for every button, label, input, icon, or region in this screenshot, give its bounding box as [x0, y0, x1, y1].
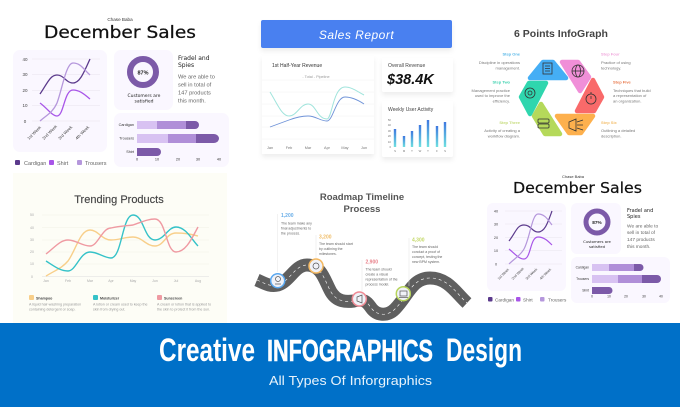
bar chart: 40	[659, 294, 663, 298]
line chart: Mar	[87, 279, 94, 283]
legend: Trousers	[85, 161, 107, 167]
step labels: Management practice	[472, 88, 511, 93]
step labels: Step Two	[493, 80, 511, 84]
line chart panel: 3rd Week	[525, 267, 538, 281]
line chart panel: 4th Week	[74, 124, 91, 141]
hexagon segments	[521, 62, 602, 134]
step labels	[472, 52, 651, 138]
bar chart: 20	[624, 294, 628, 298]
line chart: 40	[30, 226, 34, 230]
legend	[15, 160, 107, 167]
milestone text	[281, 213, 442, 286]
banner	[0, 323, 680, 407]
step labels: workflow diagram.	[488, 134, 520, 138]
text block	[627, 208, 658, 250]
weekly activity chart: 40	[388, 123, 391, 127]
heading: Trending Products	[74, 194, 164, 206]
milestone text: The team should	[412, 245, 438, 249]
heading: 6 Points InfoGraph	[514, 28, 608, 40]
line chart: May	[130, 279, 137, 283]
line chart: 0	[31, 275, 33, 279]
line chart panel: 40	[494, 210, 498, 214]
step labels: Step Four	[601, 52, 620, 56]
revenue line chart: Feb	[286, 146, 292, 150]
bar chart: Cardigan	[119, 123, 134, 127]
donut panel: 87%	[137, 70, 149, 76]
legend items	[29, 295, 211, 312]
donut panel: satisfied	[135, 98, 154, 104]
text block: sell in total of	[627, 230, 656, 236]
revenue line chart	[262, 56, 374, 154]
milestone text: The team should	[366, 268, 392, 272]
panel: December Sales right	[487, 174, 670, 303]
line chart panel: 30	[494, 222, 498, 226]
legend items: Sunscreen	[164, 296, 182, 300]
banner headline: INFOGRAPHICS	[267, 333, 433, 368]
header bar	[261, 20, 452, 48]
step labels: Techniques that build	[613, 88, 651, 93]
overall revenue card	[382, 58, 453, 92]
milestone text: The team should start	[319, 242, 353, 246]
bar chart: Shirt	[582, 288, 589, 292]
bar chart	[571, 257, 670, 303]
heading: December Sales	[513, 179, 642, 197]
bar chart: 0	[591, 294, 593, 298]
milestone text: new BPM system.	[412, 260, 440, 264]
line chart: Feb	[65, 279, 71, 283]
milestone text: 2,900	[366, 260, 378, 266]
step labels: Step Three	[499, 120, 521, 125]
revenue line chart: May	[341, 146, 349, 150]
overall revenue card: $38.4K	[386, 72, 435, 88]
author name: Chase Baba	[107, 17, 133, 22]
weekly activity chart: M	[403, 149, 406, 153]
revenue line chart: Mar	[305, 146, 312, 150]
line chart panel	[487, 203, 566, 291]
heading: Roadmap Timeline	[320, 192, 404, 203]
panel: Sales Report	[261, 20, 453, 157]
weekly activity chart: Weekly User Activity	[388, 107, 434, 113]
legend: Trousers	[548, 298, 567, 302]
banner headline: Design	[446, 332, 522, 368]
milestone text: process model.	[366, 282, 389, 286]
donut panel	[114, 50, 173, 110]
weekly activity chart: S	[444, 149, 446, 153]
line chart: Aug	[195, 279, 201, 283]
line chart: Apr	[108, 279, 115, 283]
line chart panel: 10	[22, 103, 28, 108]
step labels: Activity of creating a	[484, 128, 521, 133]
text block: this month.	[627, 244, 650, 250]
legend: Shirt	[523, 298, 533, 302]
line chart: 30	[30, 238, 34, 242]
milestone text: create a visual	[366, 272, 388, 276]
milestone text: 4,300	[412, 238, 425, 244]
legend items: containing detergent or soap.	[29, 308, 76, 312]
donut panel: Customers are	[128, 93, 161, 99]
step labels: efficiency.	[493, 98, 510, 104]
revenue line chart: - Total - Pipeline	[302, 75, 330, 79]
step labels: Step Six	[601, 120, 618, 125]
step labels: management.	[496, 66, 520, 70]
step labels: an organization.	[613, 98, 641, 104]
legend: Cardigan	[24, 161, 46, 167]
step labels: description.	[601, 134, 621, 138]
step labels: a representation of	[613, 93, 647, 98]
milestone text: final adjustments to	[281, 226, 311, 230]
step labels: Practice of using	[601, 60, 631, 65]
milestone markers	[271, 259, 410, 306]
step labels: Outlining a detailed	[601, 128, 635, 133]
weekly activity chart: 10	[388, 140, 391, 144]
legend items: A lotion or cream used to keep the	[93, 302, 148, 306]
text block: Fradel and	[178, 55, 210, 62]
line chart: Jul	[174, 279, 178, 283]
legend items: Moisturizer	[100, 296, 120, 300]
bar chart	[114, 113, 229, 167]
heading: December Sales	[44, 23, 196, 43]
banner headline	[159, 332, 522, 368]
revenue line chart: Jun	[361, 146, 367, 150]
bar chart: Shirt	[126, 150, 135, 154]
donut panel: Customers are	[583, 239, 612, 244]
line chart: 20	[30, 250, 34, 254]
line chart panel: 4th Week	[539, 267, 552, 281]
legend items: A cream or lotion that is applied to	[157, 302, 211, 306]
milestone text: by outlining the	[319, 247, 343, 251]
legend items: Shampoo	[36, 296, 53, 300]
line chart panel: 10	[494, 249, 498, 253]
donut panel: satisfied	[589, 244, 606, 249]
text block: this month.	[178, 98, 206, 104]
step labels: Discipline in operations	[479, 60, 520, 65]
weekly activity chart	[382, 101, 453, 157]
milestone text: The team make any	[281, 222, 312, 226]
weekly activity chart: T	[411, 149, 413, 153]
legend items: A liquid hair-washing preparation	[29, 302, 81, 306]
line chart	[30, 213, 209, 283]
bar chart: 20	[176, 158, 180, 162]
line chart panel: 0	[495, 262, 497, 266]
line chart: 10	[30, 262, 34, 266]
text block: sell in total of	[178, 82, 212, 88]
weekly activity chart: F	[436, 149, 438, 153]
header bar: Sales Report	[319, 28, 394, 42]
weekly activity chart: 20	[388, 134, 391, 138]
heading	[320, 192, 404, 215]
step labels: technology.	[601, 66, 621, 70]
heading: Process	[344, 204, 380, 215]
step labels: used to improve the	[475, 93, 511, 98]
bar chart: 10	[155, 158, 159, 162]
legend	[488, 297, 567, 302]
panel: 6 Points InfoGraph	[472, 28, 651, 138]
panel: December Sales left	[13, 17, 229, 167]
line chart panel: 30	[22, 72, 28, 77]
overall revenue card: Overall Revenue	[388, 63, 425, 69]
line chart panel: 1st Week	[497, 267, 510, 281]
weekly activity chart: 30	[388, 129, 391, 133]
milestone text: milestones.	[319, 252, 337, 256]
text block: We are able to	[627, 224, 658, 230]
step labels: Step Five	[613, 80, 632, 84]
line chart: Jan	[43, 279, 49, 283]
legend items: skin from drying out.	[93, 308, 125, 312]
milestone text: representation of the	[366, 278, 398, 282]
banner headline: Creative	[159, 332, 255, 368]
icons	[525, 63, 596, 131]
weekly activity chart: S	[394, 149, 396, 153]
author name: Chase Baba	[562, 174, 585, 179]
step labels: Step One	[502, 52, 521, 56]
legend: Shirt	[57, 161, 69, 167]
text block: 147 products	[178, 90, 211, 96]
bar chart: 0	[136, 158, 138, 162]
line chart panel	[13, 50, 107, 152]
bar chart: Cardigan	[576, 266, 589, 270]
line chart panel: 20	[494, 236, 498, 240]
line chart panel: 40	[22, 57, 28, 62]
milestone text: 1,200	[281, 213, 294, 219]
line chart panel: 2nd Week	[41, 123, 59, 141]
banner subtitle: All Types Of Inforgraphics	[269, 373, 433, 388]
milestone text: the process.	[281, 232, 300, 236]
line chart panel: 1st Week	[26, 124, 43, 141]
revenue line chart: Apr	[324, 146, 331, 150]
text block: Spies	[627, 214, 641, 220]
milestone text: 3,200	[319, 234, 332, 240]
weekly activity chart: 0	[389, 145, 391, 149]
text block: Fradel and	[627, 208, 653, 214]
donut panel	[571, 203, 621, 254]
text block: 147 products	[627, 237, 655, 243]
bar chart: 40	[217, 158, 221, 162]
text block: Spies	[178, 62, 194, 69]
revenue line chart: 1st Half-Year Revenue	[272, 63, 322, 69]
line chart panel: 20	[22, 88, 28, 93]
weekly activity chart: 50	[388, 118, 391, 122]
milestone text: conduct a proof of	[412, 250, 440, 254]
weekly activity chart: T	[427, 149, 429, 153]
road	[257, 265, 467, 314]
line chart panel: 2nd Week	[511, 267, 525, 281]
revenue line chart: Jan	[267, 146, 273, 150]
legend: Cardigan	[495, 298, 514, 302]
panel: Roadmap Timeline	[257, 192, 467, 314]
milestone text: concept, testing the	[412, 255, 442, 259]
bar chart: Trousers	[119, 136, 134, 140]
bar chart: 30	[196, 158, 200, 162]
weekly activity chart: W	[419, 149, 422, 153]
donut panel: 87%	[592, 220, 603, 225]
line chart panel: 0	[24, 119, 27, 124]
text block: We are able to	[178, 74, 215, 80]
legend items: the skin to protect it from the sun.	[157, 308, 210, 312]
line chart panel: 3rd Week	[57, 124, 74, 141]
line chart: Jun	[152, 279, 158, 283]
bar chart: 10	[607, 294, 611, 298]
line chart: 50	[30, 213, 34, 217]
text block	[178, 55, 215, 104]
panel: Trending Products	[13, 173, 227, 323]
bar chart: Trousers	[576, 277, 589, 281]
bar chart: 30	[642, 294, 646, 298]
